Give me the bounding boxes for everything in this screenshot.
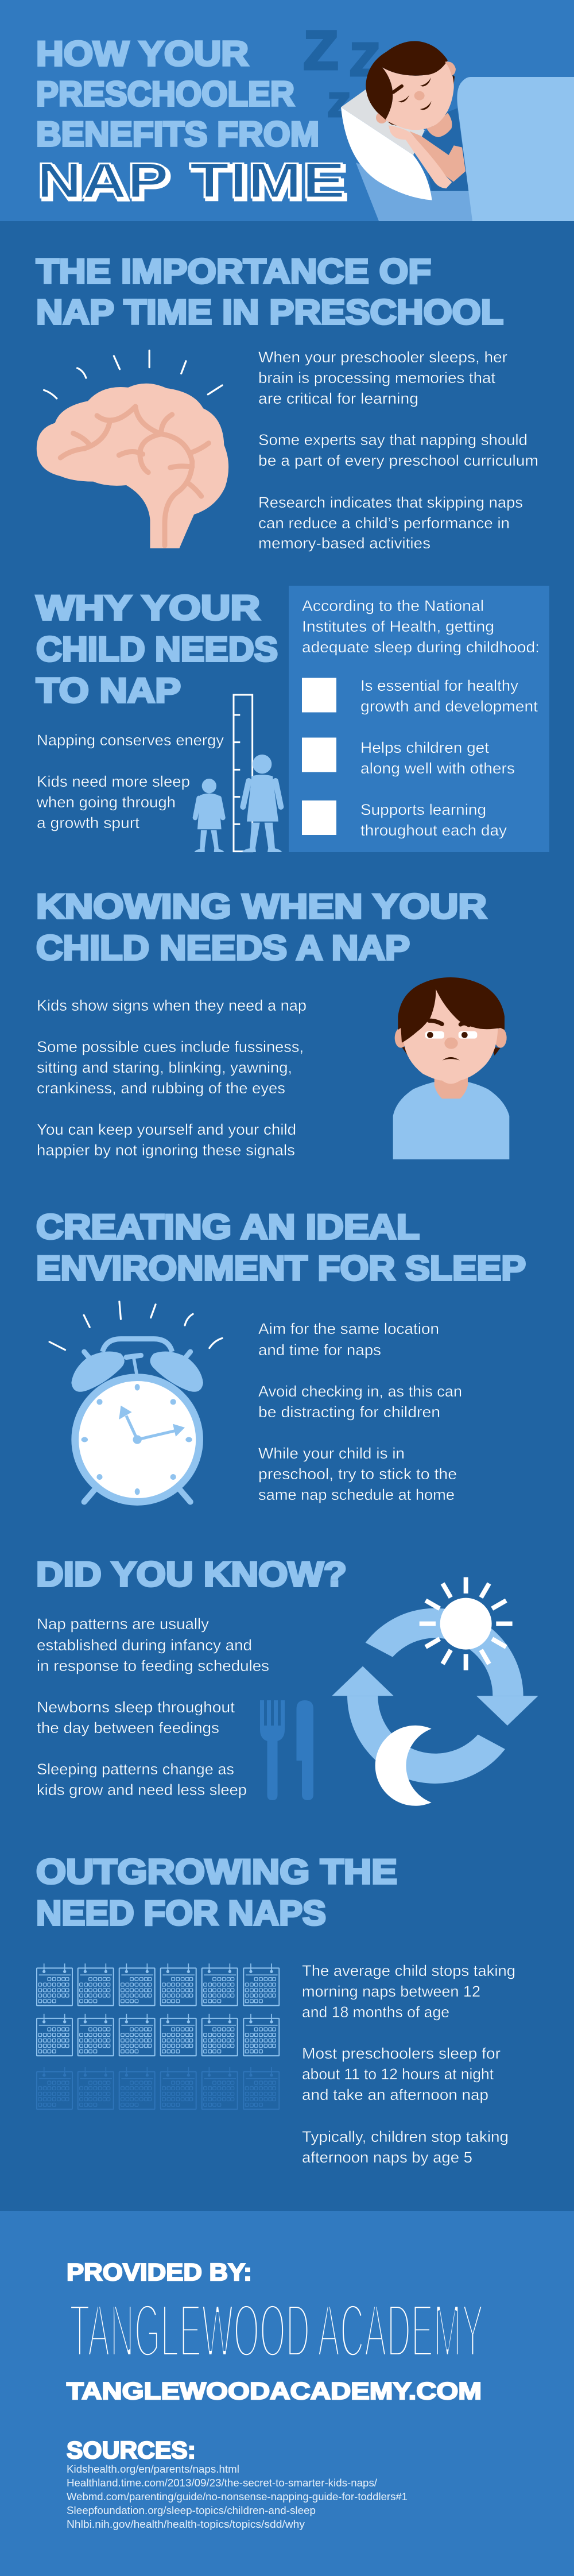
calendars row 3 faded xyxy=(37,2067,279,2109)
text block: Sleeping patterns change as xyxy=(37,1761,234,1778)
icon: sleep letters: Z xyxy=(350,34,379,85)
icon: day and night cycle xyxy=(332,1577,538,1806)
heading: CHILD NEEDS A NAP xyxy=(36,929,410,967)
checkbox item 2 xyxy=(302,737,515,777)
text block: kids grow and need less sleep xyxy=(37,1781,247,1798)
text block xyxy=(302,1962,515,2166)
checkbox item 2: along well with others xyxy=(360,760,515,777)
text block: While your child is in xyxy=(258,1445,405,1462)
title: BENEFITS FROM xyxy=(36,115,319,153)
text block: and time for naps xyxy=(258,1341,381,1359)
heading: TO NAP xyxy=(36,671,181,710)
icon: children and height ruler xyxy=(194,695,282,852)
night arrow xyxy=(332,1666,505,1784)
text block: afternoon naps by age 5 xyxy=(302,2149,472,2166)
sources list: Webmd.com/parenting/guide/no-nonsense-napping-guide-for-toddlers#1 xyxy=(67,2491,408,2502)
text block: Kids need more sleep xyxy=(37,773,190,790)
text block xyxy=(37,997,307,1159)
text block: Kids show signs when they need a nap xyxy=(37,997,307,1014)
heading: CREATING AN IDEAL xyxy=(36,1208,420,1246)
text block: morning naps between 12 xyxy=(302,1983,480,2000)
text block xyxy=(36,732,224,831)
panel: why your child needs to nap xyxy=(36,586,549,852)
heading xyxy=(36,252,503,331)
panel: creating an ideal environment xyxy=(36,1208,526,1503)
icon: brain xyxy=(37,350,228,548)
text block: Avoid checking in, as this can xyxy=(258,1383,462,1400)
heading xyxy=(36,887,487,967)
text block: brain is processing memories that xyxy=(258,369,496,386)
text block: can reduce a child’s performance in xyxy=(258,515,510,532)
icon: alarm clock xyxy=(49,1302,222,1502)
text block xyxy=(37,1615,269,1798)
heading: KNOWING WHEN YOUR xyxy=(36,887,487,926)
text block: Napping conserves energy xyxy=(37,732,224,749)
text block: when going through xyxy=(36,794,176,811)
sources list xyxy=(67,2463,408,2530)
sources list: Healthland.time.com/2013/09/23/the-secret-to-smarter-kids-naps/ xyxy=(67,2477,377,2489)
sources list: Sleepfoundation.org/sleep-topics/children-and-sleep xyxy=(67,2505,316,2516)
panel: did you know xyxy=(36,1555,538,1806)
heading: DID YOU KNOW? xyxy=(36,1555,347,1593)
heading: CHILD NEEDS xyxy=(36,630,278,668)
heading: OUTGROWING THE xyxy=(36,1852,397,1891)
text block: Newborns sleep throughout xyxy=(37,1699,235,1716)
callout intro: According to the National xyxy=(302,597,484,614)
panel: footer xyxy=(0,2211,574,2576)
moon xyxy=(375,1726,432,1806)
callout intro: Institutes of Health, getting xyxy=(302,618,494,635)
panel: importance of nap time xyxy=(36,252,538,552)
panel: header xyxy=(0,0,574,221)
sources list: Nhlbi.nih.gov/health/health-topics/topics/sdd/why xyxy=(67,2519,305,2530)
text block: same nap schedule at home xyxy=(258,1486,455,1503)
website: TANGLEWOODACADEMY.COM xyxy=(67,2377,482,2404)
checkbox item 1: growth and development xyxy=(360,698,538,715)
text block: about 11 to 12 hours at night xyxy=(302,2066,494,2083)
callout intro xyxy=(302,597,540,656)
checkbox item 3: throughout each day xyxy=(360,822,507,839)
icon: sleep letters: Z xyxy=(328,87,350,123)
text block xyxy=(258,349,538,552)
text block: in response to feeding schedules xyxy=(37,1657,269,1674)
text block: crankiness, and rubbing of the eyes xyxy=(37,1080,285,1097)
text block: and take an afternoon nap xyxy=(302,2086,488,2103)
calendars row 2 xyxy=(37,2014,279,2056)
callout background xyxy=(289,586,549,852)
text block: Some experts say that napping should xyxy=(258,431,528,448)
heading: NEED FOR NAPS xyxy=(36,1894,326,1932)
blanket xyxy=(457,77,574,221)
callout intro: adequate sleep during childhood: xyxy=(302,639,540,656)
title: PRESCHOOLER xyxy=(36,75,294,113)
text block: and 18 months of age xyxy=(302,2003,449,2021)
heading xyxy=(36,1208,526,1287)
sources heading: SOURCES: xyxy=(67,2436,196,2463)
text block: Nap patterns are usually xyxy=(37,1615,210,1633)
text block: memory-based activities xyxy=(258,535,430,552)
icon: tired child xyxy=(393,977,509,1159)
checkbox item 2: Helps children get xyxy=(360,739,490,756)
text block: preschool, try to stick to the xyxy=(258,1465,457,1483)
checkbox item 3: Supports learning xyxy=(360,801,486,818)
header background xyxy=(0,0,574,221)
title: TIME xyxy=(189,153,346,208)
text block: Some possible cues include fussiness, xyxy=(37,1038,304,1055)
title xyxy=(36,34,348,211)
icon: sleep letters: Z xyxy=(304,20,338,81)
title: TIME xyxy=(192,156,348,211)
heading xyxy=(36,589,278,710)
text block: You can keep yourself and your child xyxy=(37,1121,296,1138)
text block: a growth spurt xyxy=(37,814,140,831)
icon: sleep letters xyxy=(304,20,379,123)
icon: sleeping child xyxy=(341,41,472,221)
calendars row 1 xyxy=(37,1963,279,2006)
sun xyxy=(420,1577,513,1670)
panel: knowing when your child needs a nap xyxy=(36,887,509,1159)
text block: Most preschoolers sleep for xyxy=(302,2045,501,2062)
day arrow xyxy=(366,1608,538,1726)
text block: sitting and staring, blinking, yawning, xyxy=(37,1059,292,1076)
text block: happier by not ignoring these signals xyxy=(37,1142,295,1159)
text block: established during infancy and xyxy=(37,1637,252,1654)
title: NAP xyxy=(39,156,171,211)
icon: fork and knife xyxy=(260,1700,313,1800)
checkbox item 1 xyxy=(302,677,538,715)
text block: be distracting for children xyxy=(258,1403,440,1421)
text block: When your preschooler sleeps, her xyxy=(258,349,507,366)
heading xyxy=(36,1852,397,1932)
title: HOW YOUR xyxy=(36,34,249,73)
title: NAP xyxy=(37,153,169,208)
checkbox item 3 xyxy=(302,800,507,839)
heading: ENVIRONMENT FOR SLEEP xyxy=(36,1249,526,1287)
panel: outgrowing the need for naps xyxy=(36,1852,515,2166)
text block: the day between feedings xyxy=(37,1719,219,1736)
panel: NIH callout xyxy=(289,586,549,852)
heading: THE IMPORTANCE OF xyxy=(36,252,431,291)
text block: Research indicates that skipping naps xyxy=(258,494,523,511)
text block: Typically, children stop taking xyxy=(302,2128,509,2145)
text block: Aim for the same location xyxy=(258,1320,439,1337)
heading: NAP TIME IN PRESCHOOL xyxy=(36,293,503,331)
heading: WHY YOUR xyxy=(36,589,260,627)
text block: are critical for learning xyxy=(258,390,418,407)
checkbox item 1: Is essential for healthy xyxy=(360,677,518,694)
footer background xyxy=(0,2211,574,2576)
text block xyxy=(258,1320,462,1503)
sources list: Kidshealth.org/en/parents/naps.html xyxy=(67,2463,239,2475)
text block: be a part of every preschool curriculum xyxy=(258,452,538,469)
provided by label: PROVIDED BY: xyxy=(67,2258,252,2285)
text block: The average child stops taking xyxy=(302,1962,515,1979)
